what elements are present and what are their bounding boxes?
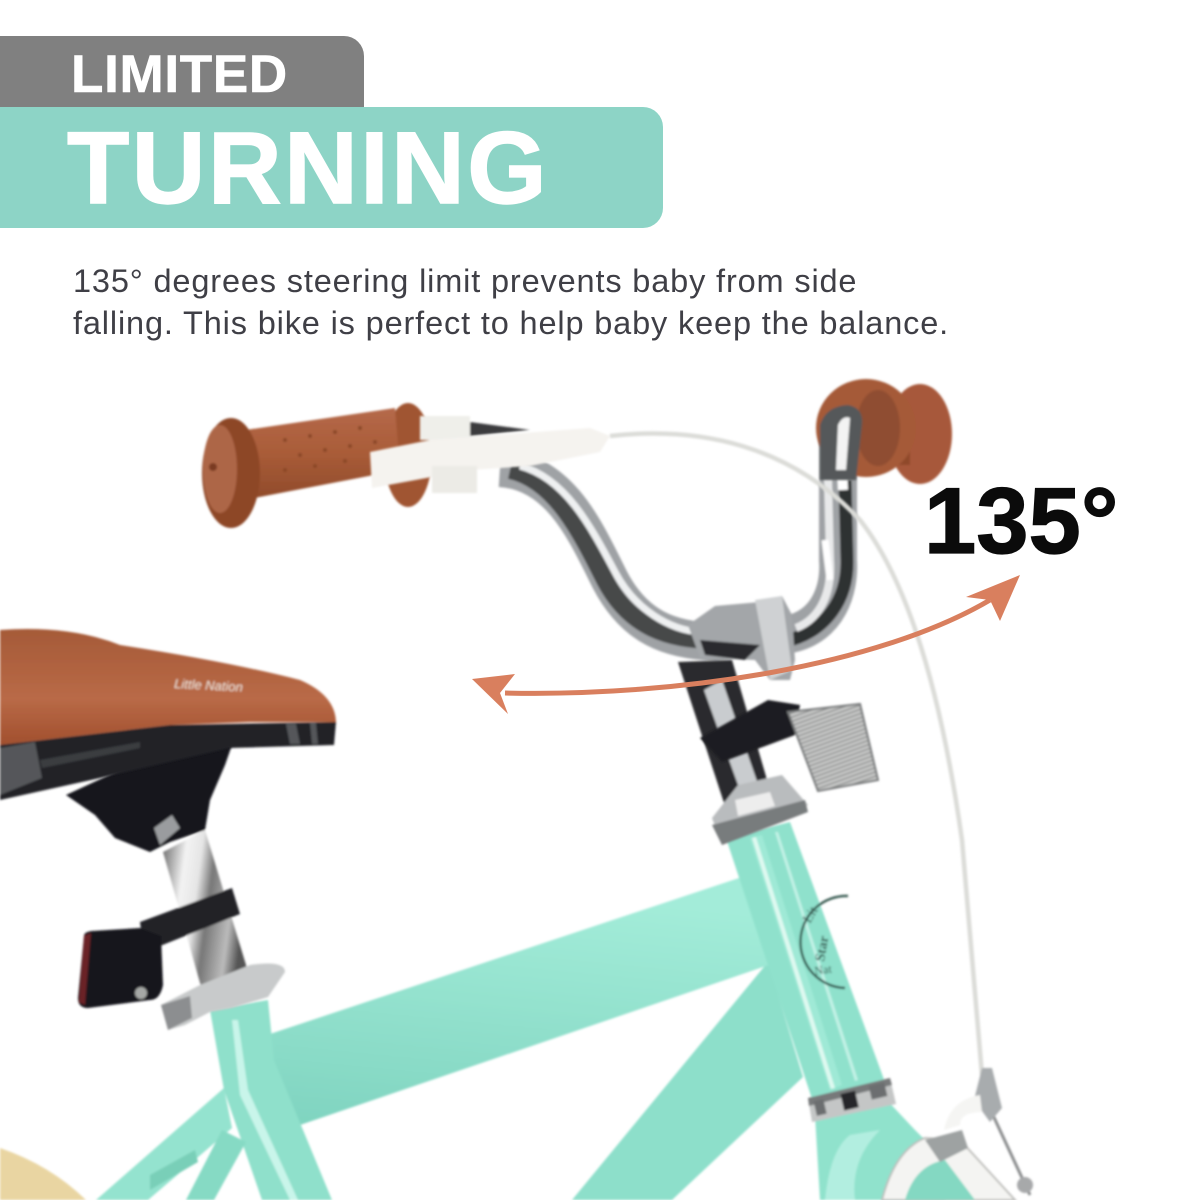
left grip — [202, 403, 432, 528]
head tube logo: Lit — [800, 904, 822, 926]
label: turning — [0, 107, 663, 228]
right grip — [816, 379, 952, 484]
handlebar — [500, 412, 850, 680]
head tube logo — [800, 896, 848, 988]
heading: turning: TURNING — [67, 111, 549, 225]
seat post and clamp — [66, 745, 285, 1030]
stem — [678, 660, 808, 845]
lower headset ring — [808, 1078, 896, 1122]
head tube logo: Nat — [813, 962, 833, 978]
saddle logo: Little Nation — [174, 676, 243, 695]
brake lever and cable — [370, 416, 1033, 1200]
description text: 135° degrees steering limit prevents baby from side — [73, 263, 857, 299]
bike frame — [0, 822, 955, 1200]
head tube logo: Star — [813, 935, 832, 963]
reflector — [700, 700, 878, 791]
description text — [73, 263, 949, 341]
label: limited — [0, 36, 364, 107]
saddle — [0, 629, 336, 800]
tyre — [0, 1148, 86, 1200]
description text: falling. This bike is perfect to help baby keep the balance. — [73, 305, 949, 341]
heading: limited: LIMITED — [71, 45, 288, 104]
arrow: 135 degree turning range — [472, 575, 1020, 714]
angle label: 135° — [924, 468, 1118, 573]
